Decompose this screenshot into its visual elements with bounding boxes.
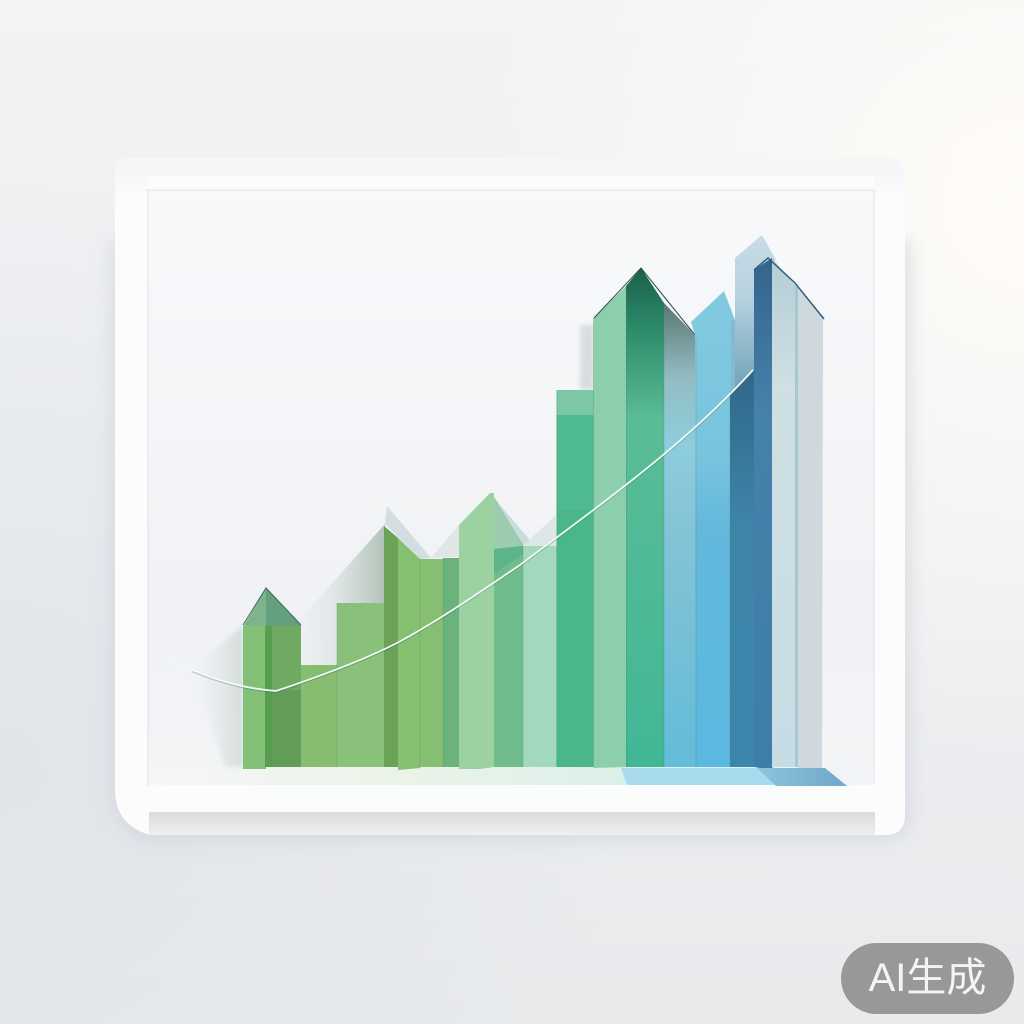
bar 5 [398, 538, 420, 770]
chart: cast shadows behind bars [193, 325, 594, 767]
bar 14 teal-grey [664, 303, 696, 767]
bar 12 mint [594, 286, 626, 768]
bar group 1 [243, 588, 301, 769]
chart: glass bars rising left to right [243, 235, 824, 770]
bar 9 [494, 497, 524, 767]
bar 16 side shade [731, 320, 735, 394]
tower roof edge [754, 258, 824, 319]
frame soft shadow [110, 240, 912, 842]
bar 7 [443, 558, 460, 767]
bar 18 strip [795, 285, 798, 767]
shelf underside [149, 812, 875, 835]
bar 19 pale grey [798, 288, 823, 769]
bar 8 light [459, 493, 494, 769]
trend line curve [170, 370, 753, 692]
frame top rail [148, 176, 875, 190]
bar 11 tall green [556, 390, 594, 767]
bar 18 pale grey-blue [772, 258, 796, 767]
bar 3 [337, 603, 384, 767]
bar 2 [301, 665, 338, 767]
shelf floor [149, 767, 874, 785]
bar 15 sky blue [691, 291, 735, 767]
bar 6 [420, 559, 444, 767]
bar 17 navy front [754, 258, 772, 770]
bar 4 dark spine [384, 526, 398, 767]
bar 13 deep green peak [626, 268, 664, 767]
AI generated badge [841, 943, 1014, 1014]
white frame [110, 158, 912, 842]
bar 10 pale [523, 546, 557, 767]
frame outer board [115, 158, 905, 835]
shelf front edge [148, 785, 875, 812]
peak edge [594, 268, 695, 335]
seams between bars [337, 290, 730, 767]
AI generated badge: AI生成 [869, 956, 986, 1000]
back pale blue bar [735, 235, 776, 395]
frame back panel [148, 190, 874, 786]
bar 16 dark blue [730, 370, 754, 767]
blue floor reflection [621, 768, 847, 786]
